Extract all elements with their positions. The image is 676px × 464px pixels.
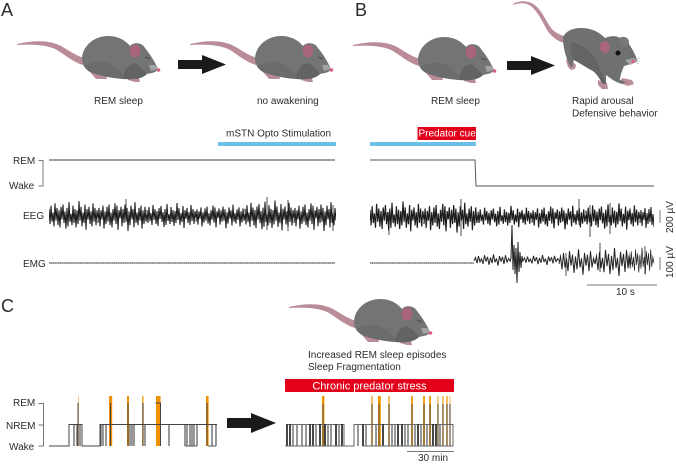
panel C bbox=[1, 296, 454, 464]
sleep state trace bbox=[370, 160, 654, 186]
sleep state trace bbox=[49, 159, 335, 161]
label bar: Chronic predator stress bbox=[285, 379, 454, 392]
label: no awakening: no awakening bbox=[257, 96, 319, 107]
label: REM sleep: REM sleep bbox=[431, 96, 480, 107]
scale bar: 200 µV: 200 µV bbox=[665, 201, 676, 233]
scale bar: 30 min bbox=[407, 452, 454, 464]
scale bar: 10 s: 10 s bbox=[616, 287, 635, 298]
illustration: sleeping mouse bbox=[289, 299, 432, 345]
y labels: sleep stages bbox=[6, 398, 44, 453]
panel A bbox=[1, 0, 343, 270]
scale bar: 100 µV bbox=[660, 246, 676, 278]
label: outcomes: Sleep Fragmentation bbox=[308, 362, 401, 373]
scale bar: 10 s bbox=[587, 285, 657, 298]
arrow bbox=[227, 413, 276, 433]
y labels: sleep stages: NREM bbox=[6, 421, 35, 432]
label: REM sleep: REM sleep bbox=[94, 96, 143, 107]
illustration: sleeping mouse with stimulation bbox=[190, 36, 333, 82]
arrow bbox=[178, 55, 226, 74]
label: EMG: EMG bbox=[23, 259, 46, 270]
panel B bbox=[353, 0, 676, 298]
predator cue tag: Predator cue bbox=[418, 128, 476, 140]
stress hypnogram bbox=[285, 396, 453, 446]
arrow bbox=[507, 56, 555, 75]
label: EEG: EEG bbox=[23, 211, 44, 222]
scale bar: 100 µV: 100 µV bbox=[665, 246, 676, 278]
heading: A: A bbox=[1, 0, 13, 20]
y labels: sleep state: Wake bbox=[9, 181, 35, 192]
heading: C: C bbox=[1, 296, 14, 316]
y labels: sleep stages: REM bbox=[13, 398, 35, 409]
label: behavior outcome: Rapid arousal bbox=[572, 96, 634, 107]
stimulation bar bbox=[218, 142, 336, 146]
label bar: Chronic predator stress: Chronic predator stress bbox=[312, 380, 427, 392]
label: behavior outcome bbox=[572, 96, 658, 120]
label: outcomes: Increased REM sleep episodes bbox=[308, 350, 446, 361]
illustration: sleeping mouse bbox=[353, 37, 496, 83]
label: outcomes bbox=[308, 350, 446, 373]
illustration: alert mouse bbox=[513, 1, 640, 89]
baseline hypnogram bbox=[49, 396, 217, 446]
illustration: sleeping mouse bbox=[17, 36, 160, 82]
y labels: sleep stages: Wake bbox=[9, 442, 35, 453]
stimulation bar bbox=[370, 142, 476, 146]
scale bar: 200 µV bbox=[660, 201, 676, 233]
y labels: sleep state: REM bbox=[13, 156, 35, 167]
EMG trace bbox=[49, 262, 335, 264]
y labels: sleep state bbox=[9, 156, 43, 192]
scale bar: 30 min: 30 min bbox=[418, 453, 448, 464]
label: mSTN Opto Stimulation: mSTN Opto Stimulation bbox=[226, 128, 331, 140]
heading: B: B bbox=[355, 0, 367, 20]
EEG trace bbox=[370, 199, 676, 237]
EEG trace bbox=[49, 197, 343, 231]
label: behavior outcome: Defensive behavior bbox=[572, 108, 658, 120]
EMG trace bbox=[370, 225, 654, 283]
